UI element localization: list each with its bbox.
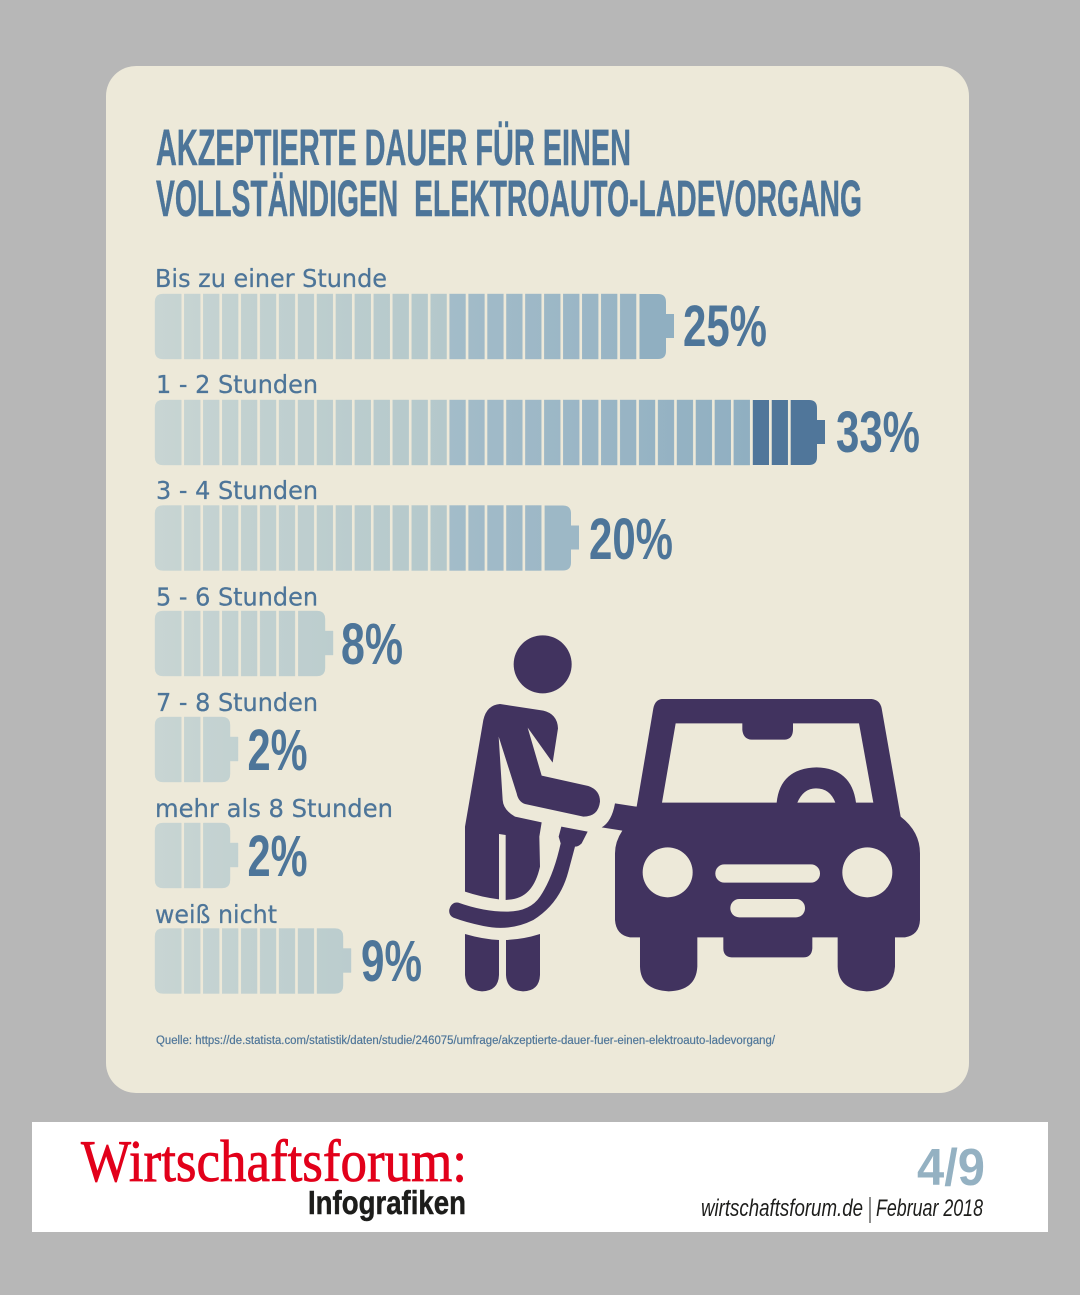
row: 1 - 2 Stunden 33%: [155, 370, 920, 465]
label: mehr als 8 Stunden: [155, 794, 393, 823]
row: 7 - 8 Stunden 2%: [155, 688, 318, 783]
battery bar: [155, 400, 825, 465]
battery bar: [155, 717, 238, 782]
title: AKZEPTIERTE DAUER FÜR EINEN: [156, 119, 631, 176]
value: 9%: [361, 929, 422, 994]
value: 2%: [248, 718, 308, 783]
title: [156, 119, 862, 227]
page number: 4/9: [917, 1139, 985, 1197]
label: 5 - 6 Stunden: [156, 582, 318, 612]
label: weiß nicht: [155, 900, 277, 929]
label: 3 - 4 Stunden: [156, 476, 318, 505]
website and date: wirtschaftsforum.de: [701, 1195, 863, 1222]
value: 2%: [248, 824, 308, 889]
row: mehr als 8 Stunden 2%: [155, 794, 393, 889]
subtitle: Infografiken: [308, 1184, 466, 1221]
battery bar: [155, 928, 351, 994]
row: 5 - 6 Stunden 8%: [155, 582, 403, 677]
icon: car lights and grille: [643, 847, 892, 917]
battery bar: [155, 294, 674, 359]
panel: footer: [32, 1122, 1048, 1232]
icon: car: [602, 699, 920, 991]
brand name: Wirtschaftsforum:: [81, 1128, 467, 1194]
label: 7 - 8 Stunden: [156, 688, 318, 717]
row: Bis zu einer Stunde 25%: [155, 264, 767, 359]
icon: person lower legs: [465, 934, 540, 991]
value: 8%: [341, 612, 403, 677]
battery bar: [155, 611, 333, 676]
icon: charging hose and nozzle: [449, 827, 588, 928]
source text: Quelle: https://de.statista.com/statistik/daten/studie/246075/umfrage/akzeptierte-dauer-fuer-einen-elektroauto-ladevorgang/: [156, 1035, 776, 1047]
icon: person charging electric car: [449, 635, 920, 991]
value: 33%: [836, 400, 920, 465]
label: 1 - 2 Stunden: [156, 370, 318, 399]
row: 3 - 4 Stunden 20%: [155, 476, 673, 572]
panel: infographic card: [106, 66, 969, 1093]
label: Bis zu einer Stunde: [155, 264, 387, 293]
battery bar: [155, 506, 579, 570]
website and date: Februar 2018: [876, 1195, 983, 1222]
icon: person torso and upper legs: [465, 704, 600, 900]
icon: person head: [514, 635, 572, 693]
row: weiß nicht 9%: [155, 900, 422, 994]
value: 25%: [683, 294, 767, 359]
value: 20%: [589, 507, 673, 572]
battery bar: [155, 823, 238, 888]
